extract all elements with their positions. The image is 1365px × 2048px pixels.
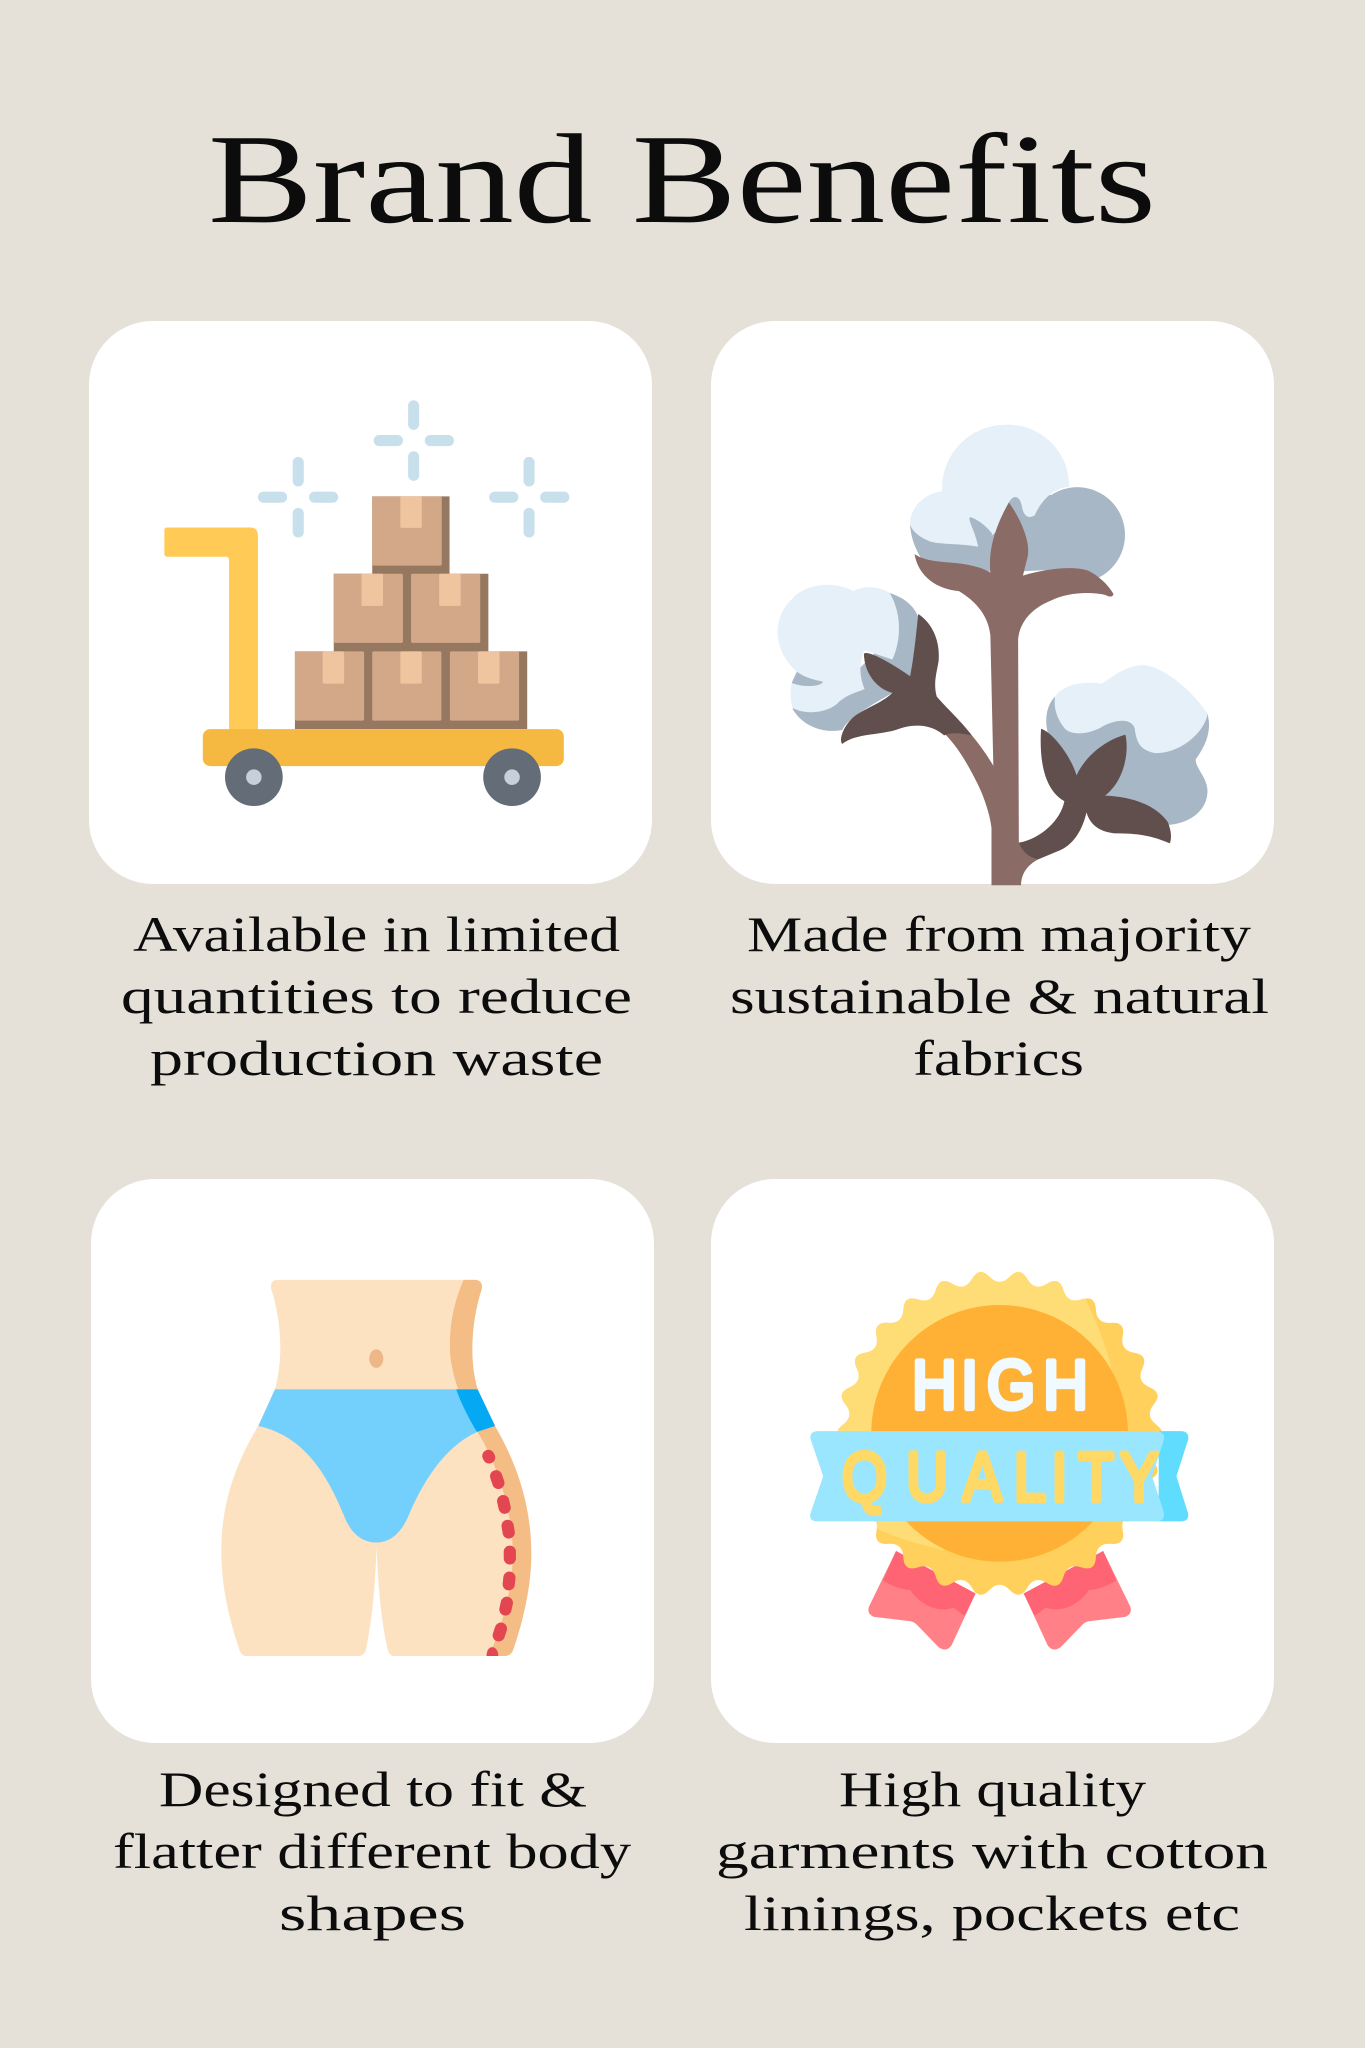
scalloped seal (837, 1272, 1162, 1595)
left leaves (841, 614, 972, 744)
right ribbon tail (1024, 1551, 1131, 1650)
right leaves (1019, 729, 1171, 859)
panel: high quality (711, 1179, 1274, 1743)
left ribbon tail (868, 1551, 976, 1650)
caption: body fit: flatter different body (113, 1823, 631, 1879)
panel: limited quantities (89, 321, 652, 884)
icon: quality badge (810, 1272, 1188, 1650)
icon: cart with boxes (164, 406, 564, 806)
measuring dashes (487, 1456, 510, 1656)
banner (810, 1431, 1164, 1521)
underwear shading (456, 1389, 495, 1432)
icon: hips with measuring line (221, 1280, 531, 1656)
caption: high quality (716, 1761, 1268, 1941)
boxes (295, 496, 527, 729)
icon: sparkles (263, 406, 564, 532)
caption: natural fabrics: sustainable & natural (730, 968, 1269, 1024)
caption: high quality: garments with cotton (716, 1823, 1268, 1879)
caption: limited quantities: Available in limited (133, 906, 620, 962)
caption: limited quantities: production waste (150, 1030, 603, 1086)
stem (915, 502, 1114, 885)
caption: limited quantities: quantities to reduce (121, 968, 632, 1024)
seal centre (871, 1305, 1128, 1562)
underwear (258, 1389, 495, 1542)
body shading (450, 1280, 531, 1656)
title: Brand Benefits (208, 108, 1156, 250)
cart platform (203, 729, 564, 766)
panel: natural fabrics (711, 321, 1274, 885)
caption: natural fabrics: Made from majority (747, 906, 1251, 962)
caption: high quality: High quality (839, 1761, 1146, 1817)
banner end (1159, 1431, 1188, 1521)
panel: body fit (91, 1179, 654, 1743)
caption: body fit: Designed to fit & (159, 1761, 587, 1817)
caption: high quality: linings, pockets etc (744, 1885, 1240, 1941)
caption: natural fabrics: fabrics (913, 1030, 1084, 1086)
caption: body fit (113, 1761, 631, 1941)
word: HIGH: HIGH (912, 1347, 1088, 1423)
caption: body fit: shapes (279, 1885, 466, 1941)
cart handle (164, 528, 258, 732)
right cotton boll (1046, 665, 1209, 825)
caption: natural fabrics (730, 906, 1269, 1086)
top cotton boll (910, 425, 1125, 583)
left cotton boll (778, 585, 920, 731)
icon: cotton plant (778, 425, 1209, 885)
navel (369, 1349, 383, 1368)
word: QUALITY: QUALITY (842, 1439, 1158, 1515)
wheels (225, 748, 541, 806)
body (221, 1280, 531, 1656)
caption: limited quantities (121, 906, 632, 1086)
